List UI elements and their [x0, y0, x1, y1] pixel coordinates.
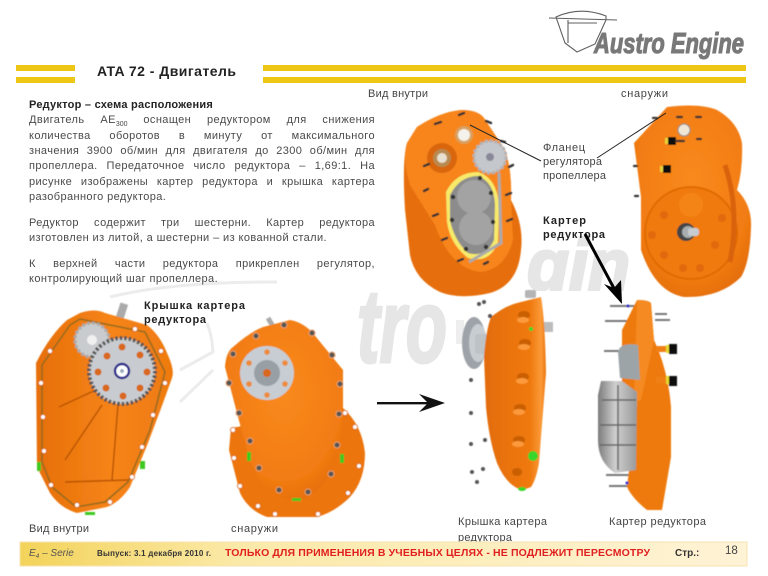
arrow: to gearbox housing	[585, 234, 622, 304]
text block: gearbox description	[29, 99, 375, 285]
text block: gearbox description: количества оборотов в минуту от максимального	[29, 130, 375, 142]
text block: gearbox description: контролирующий шаг пропеллера.	[29, 273, 218, 285]
label: gearbox housing	[543, 215, 606, 241]
label: outside top: снаружи	[621, 88, 668, 100]
label: housing cover side	[458, 516, 548, 544]
logo: Austro Engine	[549, 11, 744, 60]
label: housing cover side: редуктора	[458, 532, 513, 544]
gearbox housing: inside view	[404, 110, 522, 296]
label: regulator flange: Фланец	[543, 142, 586, 154]
label: regulator flange: регулятора	[543, 156, 603, 168]
text block: gearbox description: рисунке изображены картер редуктора и крышка картера	[29, 176, 375, 188]
label: view inside top: Вид внутри	[368, 88, 428, 100]
watermark: Austro Engine: gin	[526, 226, 630, 306]
label: housing cover: редуктора	[144, 314, 207, 326]
footer band: 4	[36, 553, 40, 560]
footer band: Стр.:	[675, 548, 699, 559]
text block: gearbox description: пропеллера. Передаточное число редуктора – 1,69:1. На	[29, 160, 375, 172]
label: gearbox housing: Картер	[543, 215, 586, 227]
housing cover: side view	[462, 290, 553, 491]
footer band	[20, 542, 747, 566]
text block: gearbox description: Редуктор содержит три шестерни. Картер редуктора	[29, 217, 375, 229]
label: outside bottom: снаружи	[231, 523, 278, 535]
label: gearbox housing: редуктора	[543, 229, 606, 241]
text block: gearbox description: Двигатель АЕ300 оснащен редуктором для снижения	[29, 114, 375, 128]
footer band: ТОЛЬКО ДЛЯ ПРИМЕНЕНИЯ В УЧЕБНЫХ ЦЕЛЯХ - НЕ ПОДЛЕЖИТ ПЕРЕСМОТРУ	[225, 547, 650, 559]
leader lines: regulator flange	[470, 113, 666, 161]
label: inside view bottom: Вид внутри	[29, 523, 89, 535]
footer band: E	[29, 548, 36, 559]
footer band: – Serie	[39, 548, 74, 559]
watermark: Austro Engine	[110, 226, 630, 402]
gearbox housing: side view	[598, 300, 677, 510]
label: housing cover side: Крышка картера	[458, 516, 548, 528]
gearbox housing: outside view	[634, 106, 751, 297]
label: gearbox side: Картер редуктора	[609, 516, 707, 528]
header band right	[263, 65, 746, 83]
text block: gearbox description: Редуктор – схема расположения	[29, 99, 213, 111]
title: ATA 72 - Двигатель	[97, 63, 236, 79]
housing cover: inside view	[36, 302, 173, 515]
footer band: 18	[725, 545, 738, 557]
footer band: Выпуск: 3.1 декабря 2010 г.	[97, 549, 211, 558]
housing cover: outside view	[225, 318, 365, 517]
text block: gearbox description: К верхней части редуктора прикреплен регулятор,	[29, 258, 375, 270]
text block: gearbox description: разобранного редуктора.	[29, 191, 166, 203]
label: regulator flange	[543, 142, 607, 182]
text block: gearbox description: значения 3900 об/мин для двигателя до 2300 об/мин для	[29, 145, 375, 157]
label: regulator flange: пропеллера	[543, 170, 607, 182]
label: housing cover	[144, 300, 246, 326]
watermark: Austro Engine: tro	[357, 269, 447, 385]
text block: gearbox description: изготовлен из литой, а шестерни – из кованной стали.	[29, 232, 327, 244]
arrow: to side views	[377, 394, 445, 412]
header band left	[16, 65, 75, 83]
label: housing cover: Крышка картера	[144, 300, 246, 312]
